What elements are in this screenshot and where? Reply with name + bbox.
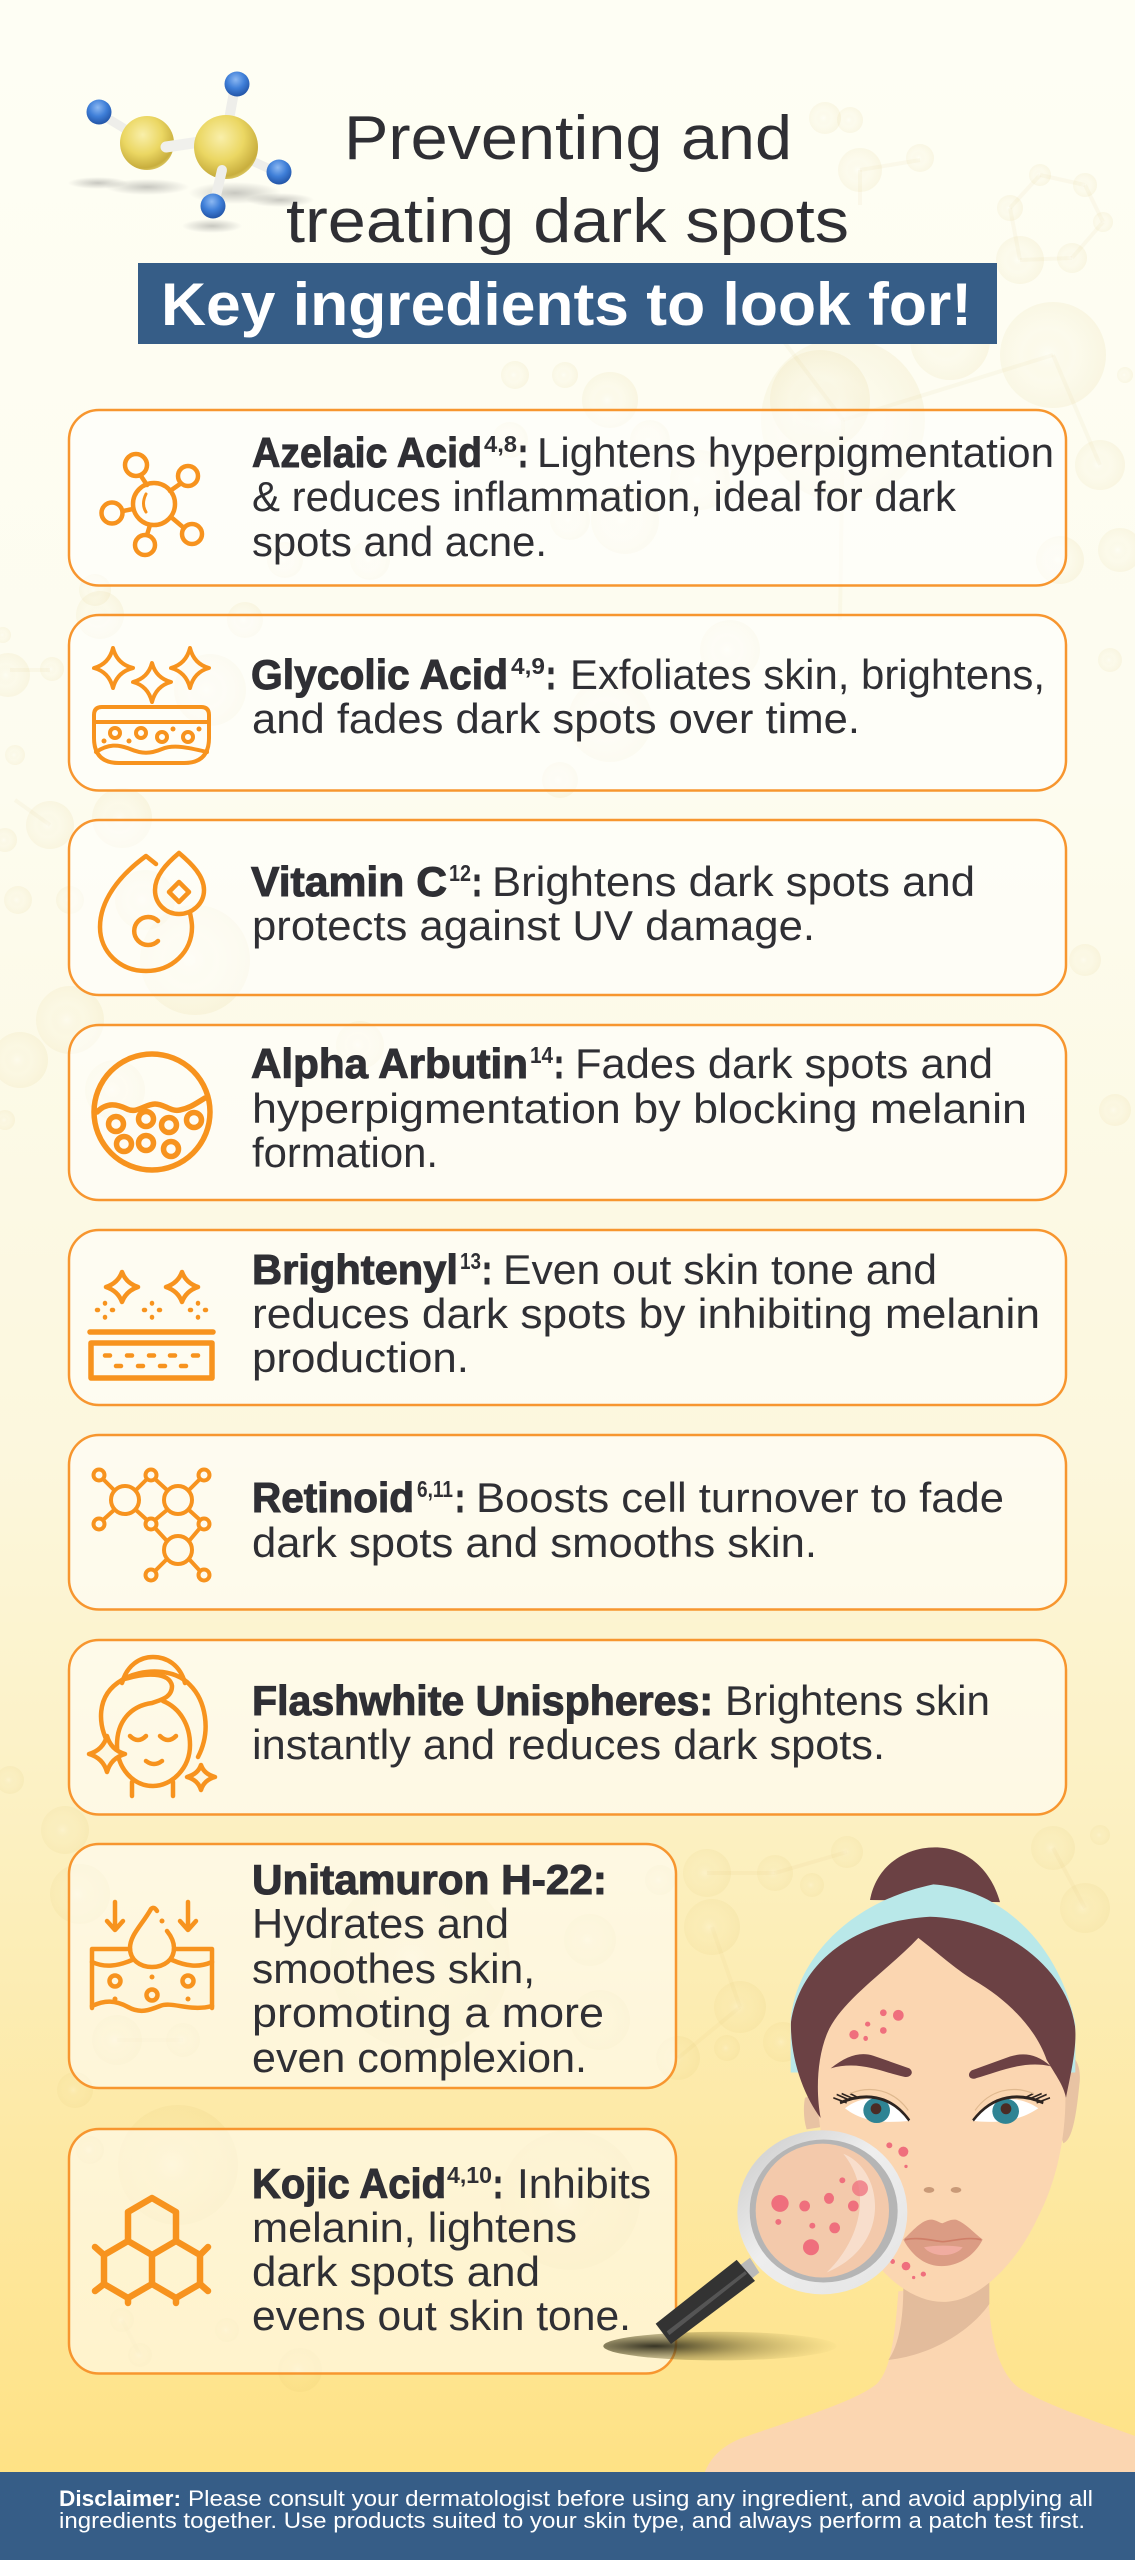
text: Brightenyl: 13: [460, 1248, 481, 1274]
icon: 3D molecule illustration: [68, 72, 314, 233]
title: treating dark spots: [286, 187, 849, 256]
text: Alpha Arbutin: hyperpigmentation by blocking melanin: [252, 1085, 1027, 1132]
headband: [791, 1884, 1075, 2073]
text: Brightenyl: [252, 1246, 1040, 1381]
text: Vitamin C: Brightens dark spots and: [492, 858, 975, 905]
text: Vitamin C: [251, 858, 975, 949]
text: Alpha Arbutin: formation.: [252, 1129, 438, 1176]
text: Glycolic Acid: :: [546, 651, 556, 698]
panel: Unitamuron H-22: [69, 1844, 676, 2088]
panel: Kojic Acid: [69, 2129, 676, 2374]
text: Unitamuron H-22: Hydrates and: [252, 1900, 509, 1947]
text: Unitamuron H-22: promoting a more: [252, 1989, 604, 2036]
text: Vitamin C: 12: [449, 860, 471, 886]
text: Vitamin C: Vitamin C: [251, 858, 447, 905]
illustration: woman's face with magnifying glass: [603, 1847, 1135, 2477]
text: Retinoid: :: [455, 1474, 465, 1521]
text: Alpha Arbutin: 14: [530, 1042, 553, 1068]
icon: exfoliated skin: [94, 648, 209, 763]
magnifying glass: [656, 2130, 907, 2344]
panel: Glycolic Acid: [69, 615, 1066, 790]
icon: skin circle with cells: [94, 1054, 210, 1170]
icon: molecule: [102, 454, 202, 555]
text: Alpha Arbutin: :: [554, 1040, 564, 1087]
text: Retinoid: Boosts cell turnover to fade: [476, 1474, 1004, 1521]
disclaimer footer: [0, 2472, 1135, 2560]
icon: hexagons: [95, 2198, 208, 2303]
icon: sparkling skin layer: [90, 1272, 213, 1378]
bun: [870, 1847, 1000, 1902]
text: Brightenyl: production.: [252, 1334, 469, 1381]
text: Alpha Arbutin: Fades dark spots and: [575, 1040, 993, 1087]
panel: Alpha Arbutin: [69, 1025, 1066, 1200]
text: Azelaic Acid: & reduces inflammation, ideal for dark: [252, 473, 957, 520]
hair: [791, 1917, 1075, 2118]
text: Glycolic Acid: Exfoliates skin, brightens,: [570, 651, 1045, 698]
text: Unitamuron H-22: smoothes skin,: [252, 1945, 535, 1992]
text: Unitamuron H-22: Unitamuron H-22:: [252, 1856, 607, 1903]
disclaimer footer: ingredients together. Use products suited to your skin type, and always perform a patch test first.: [59, 2508, 1085, 2533]
text: Kojic Acid: Kojic Acid: [252, 2160, 446, 2207]
acne spots: [849, 2009, 926, 2279]
panel: Azelaic Acid: [69, 410, 1066, 586]
ears: [804, 2054, 1080, 2143]
text: Brightenyl: Brightenyl: [252, 1246, 458, 1293]
title: Preventing and: [344, 104, 792, 173]
title: [286, 104, 849, 256]
text: Azelaic Acid: :: [518, 429, 528, 476]
text: Brightenyl: Even out skin tone and: [503, 1246, 937, 1293]
text: Brightenyl: :: [482, 1246, 492, 1293]
subtitle banner: Key ingredients to look for!: [161, 271, 972, 338]
text: Kojic Acid: melanin, lightens: [252, 2204, 577, 2251]
text: Kojic Acid: Inhibits: [517, 2160, 651, 2207]
text: Glycolic Acid: [251, 651, 1045, 742]
text: Kojic Acid: dark spots and: [252, 2248, 540, 2295]
icon: vitamin C drops: [100, 853, 204, 971]
neck shadow: [888, 2281, 989, 2360]
text: Kojic Acid: [252, 2160, 651, 2339]
text: Flashwhite Unispheres: [252, 1677, 990, 1768]
text: Retinoid: [252, 1474, 1004, 1566]
text: Vitamin C: protects against UV damage.: [252, 902, 815, 949]
text: Glycolic Acid: 4,9: [511, 653, 545, 679]
handle shadow: [603, 2332, 837, 2360]
text: Unitamuron H-22: even complexion.: [252, 2034, 587, 2081]
face: [817, 1938, 1065, 2302]
icon: water drop on skin: [92, 1902, 212, 2011]
text: Brightenyl: reduces dark spots by inhibiting melanin: [252, 1290, 1040, 1337]
panel: Flashwhite Unispheres: [69, 1640, 1066, 1814]
text: Kojic Acid: 4,10: [447, 2162, 492, 2188]
eyebrows: [831, 2054, 1051, 2079]
panel: Brightenyl: [69, 1230, 1066, 1405]
panel: Vitamin C: [69, 820, 1066, 995]
text: Retinoid: dark spots and smooths skin.: [252, 1519, 817, 1566]
eyes: [833, 2089, 1050, 2124]
text: Flashwhite Unispheres: Brightens skin: [725, 1677, 990, 1724]
text: Retinoid: Retinoid: [252, 1474, 414, 1521]
icon: retinoid molecule: [94, 1470, 210, 1580]
text: Glycolic Acid: and fades dark spots over time.: [252, 695, 860, 742]
icon: face with towel: [89, 1657, 215, 1796]
disclaimer footer: Disclaimer:: [59, 2486, 181, 2511]
text: Azelaic Acid: Azelaic Acid: [252, 429, 482, 476]
text: Azelaic Acid: 4,8: [484, 431, 517, 457]
text: Vitamin C: :: [472, 858, 482, 905]
disclaimer footer: Please consult your dermatologist before using any ingredient, and avoid applying all: [188, 2486, 1093, 2511]
panel: Retinoid: [69, 1435, 1066, 1610]
text: Flashwhite Unispheres: Flashwhite Unispheres:: [252, 1677, 713, 1724]
icon dots: [112, 1918, 190, 2002]
text: Alpha Arbutin: Alpha Arbutin: [251, 1040, 528, 1087]
lips: [903, 2220, 983, 2266]
text: Kojic Acid: :: [493, 2160, 503, 2207]
text: Azelaic Acid: spots and acne.: [252, 518, 547, 565]
text: Glycolic Acid: Glycolic Acid: [251, 651, 508, 698]
text: Flashwhite Unispheres: instantly and reduces dark spots.: [252, 1721, 885, 1768]
text: Retinoid: 6,11: [417, 1476, 453, 1502]
neck and shoulders: [703, 2283, 1135, 2477]
text: Alpha Arbutin: [251, 1040, 1027, 1176]
text: Azelaic Acid: Lightens hyperpigmentation: [537, 429, 1054, 476]
icon dots: [102, 726, 202, 744]
text: Unitamuron H-22: [252, 1856, 607, 2081]
nostrils: [924, 2187, 961, 2193]
text: Kojic Acid: evens out skin tone.: [252, 2292, 631, 2339]
text: Azelaic Acid: [252, 429, 1054, 565]
